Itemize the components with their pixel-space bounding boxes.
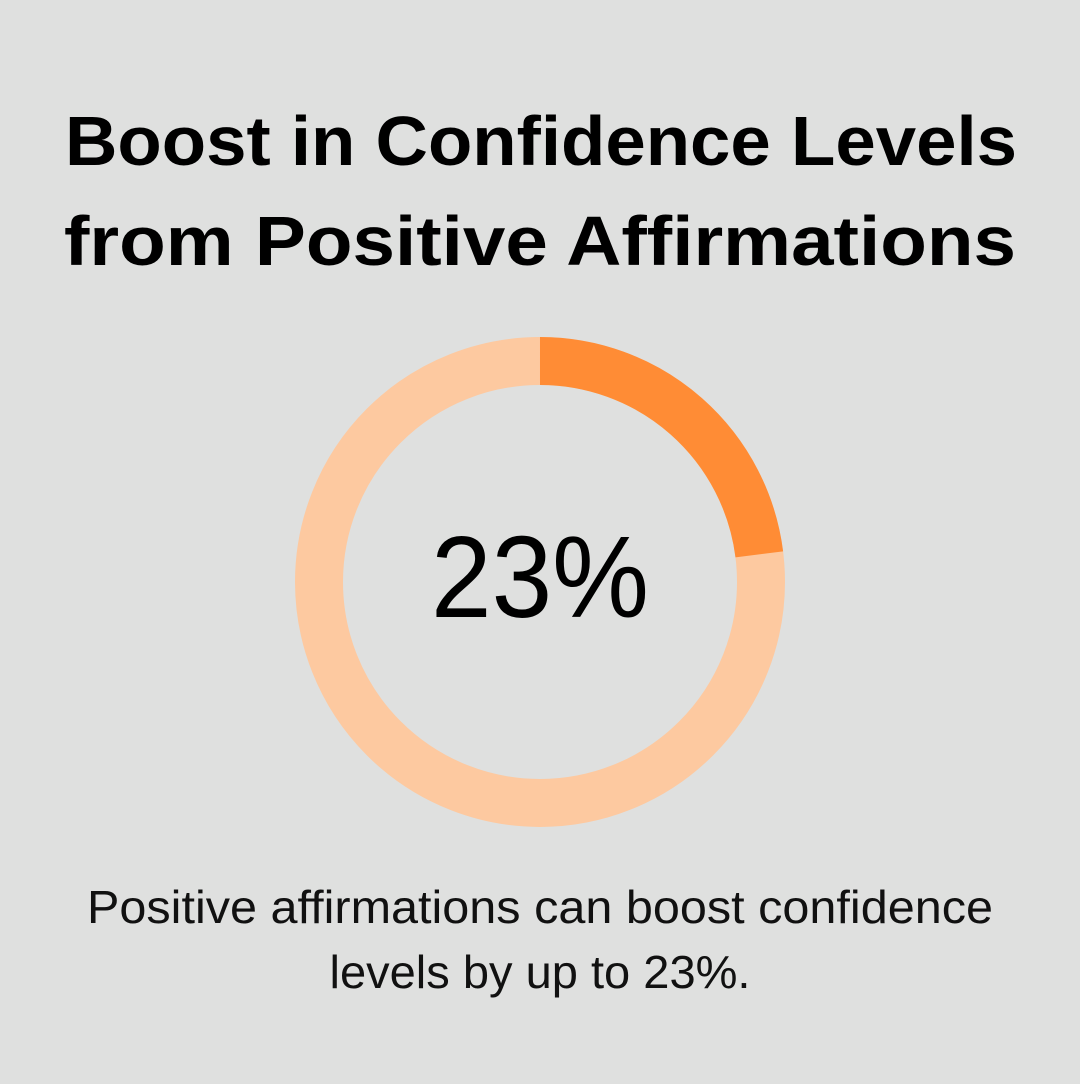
donut value arc <box>540 361 759 554</box>
title: Boost in Confidence Levels <box>65 102 1017 180</box>
caption: Positive affirmations can boost confidence <box>87 881 993 933</box>
center value: 23% <box>431 512 649 642</box>
donut chart: 23% <box>319 361 761 803</box>
donut track <box>319 361 761 803</box>
title <box>64 102 1017 280</box>
caption: levels by up to 23%. <box>330 946 750 998</box>
caption <box>87 881 993 998</box>
title: from Positive Affirmations <box>64 202 1016 280</box>
